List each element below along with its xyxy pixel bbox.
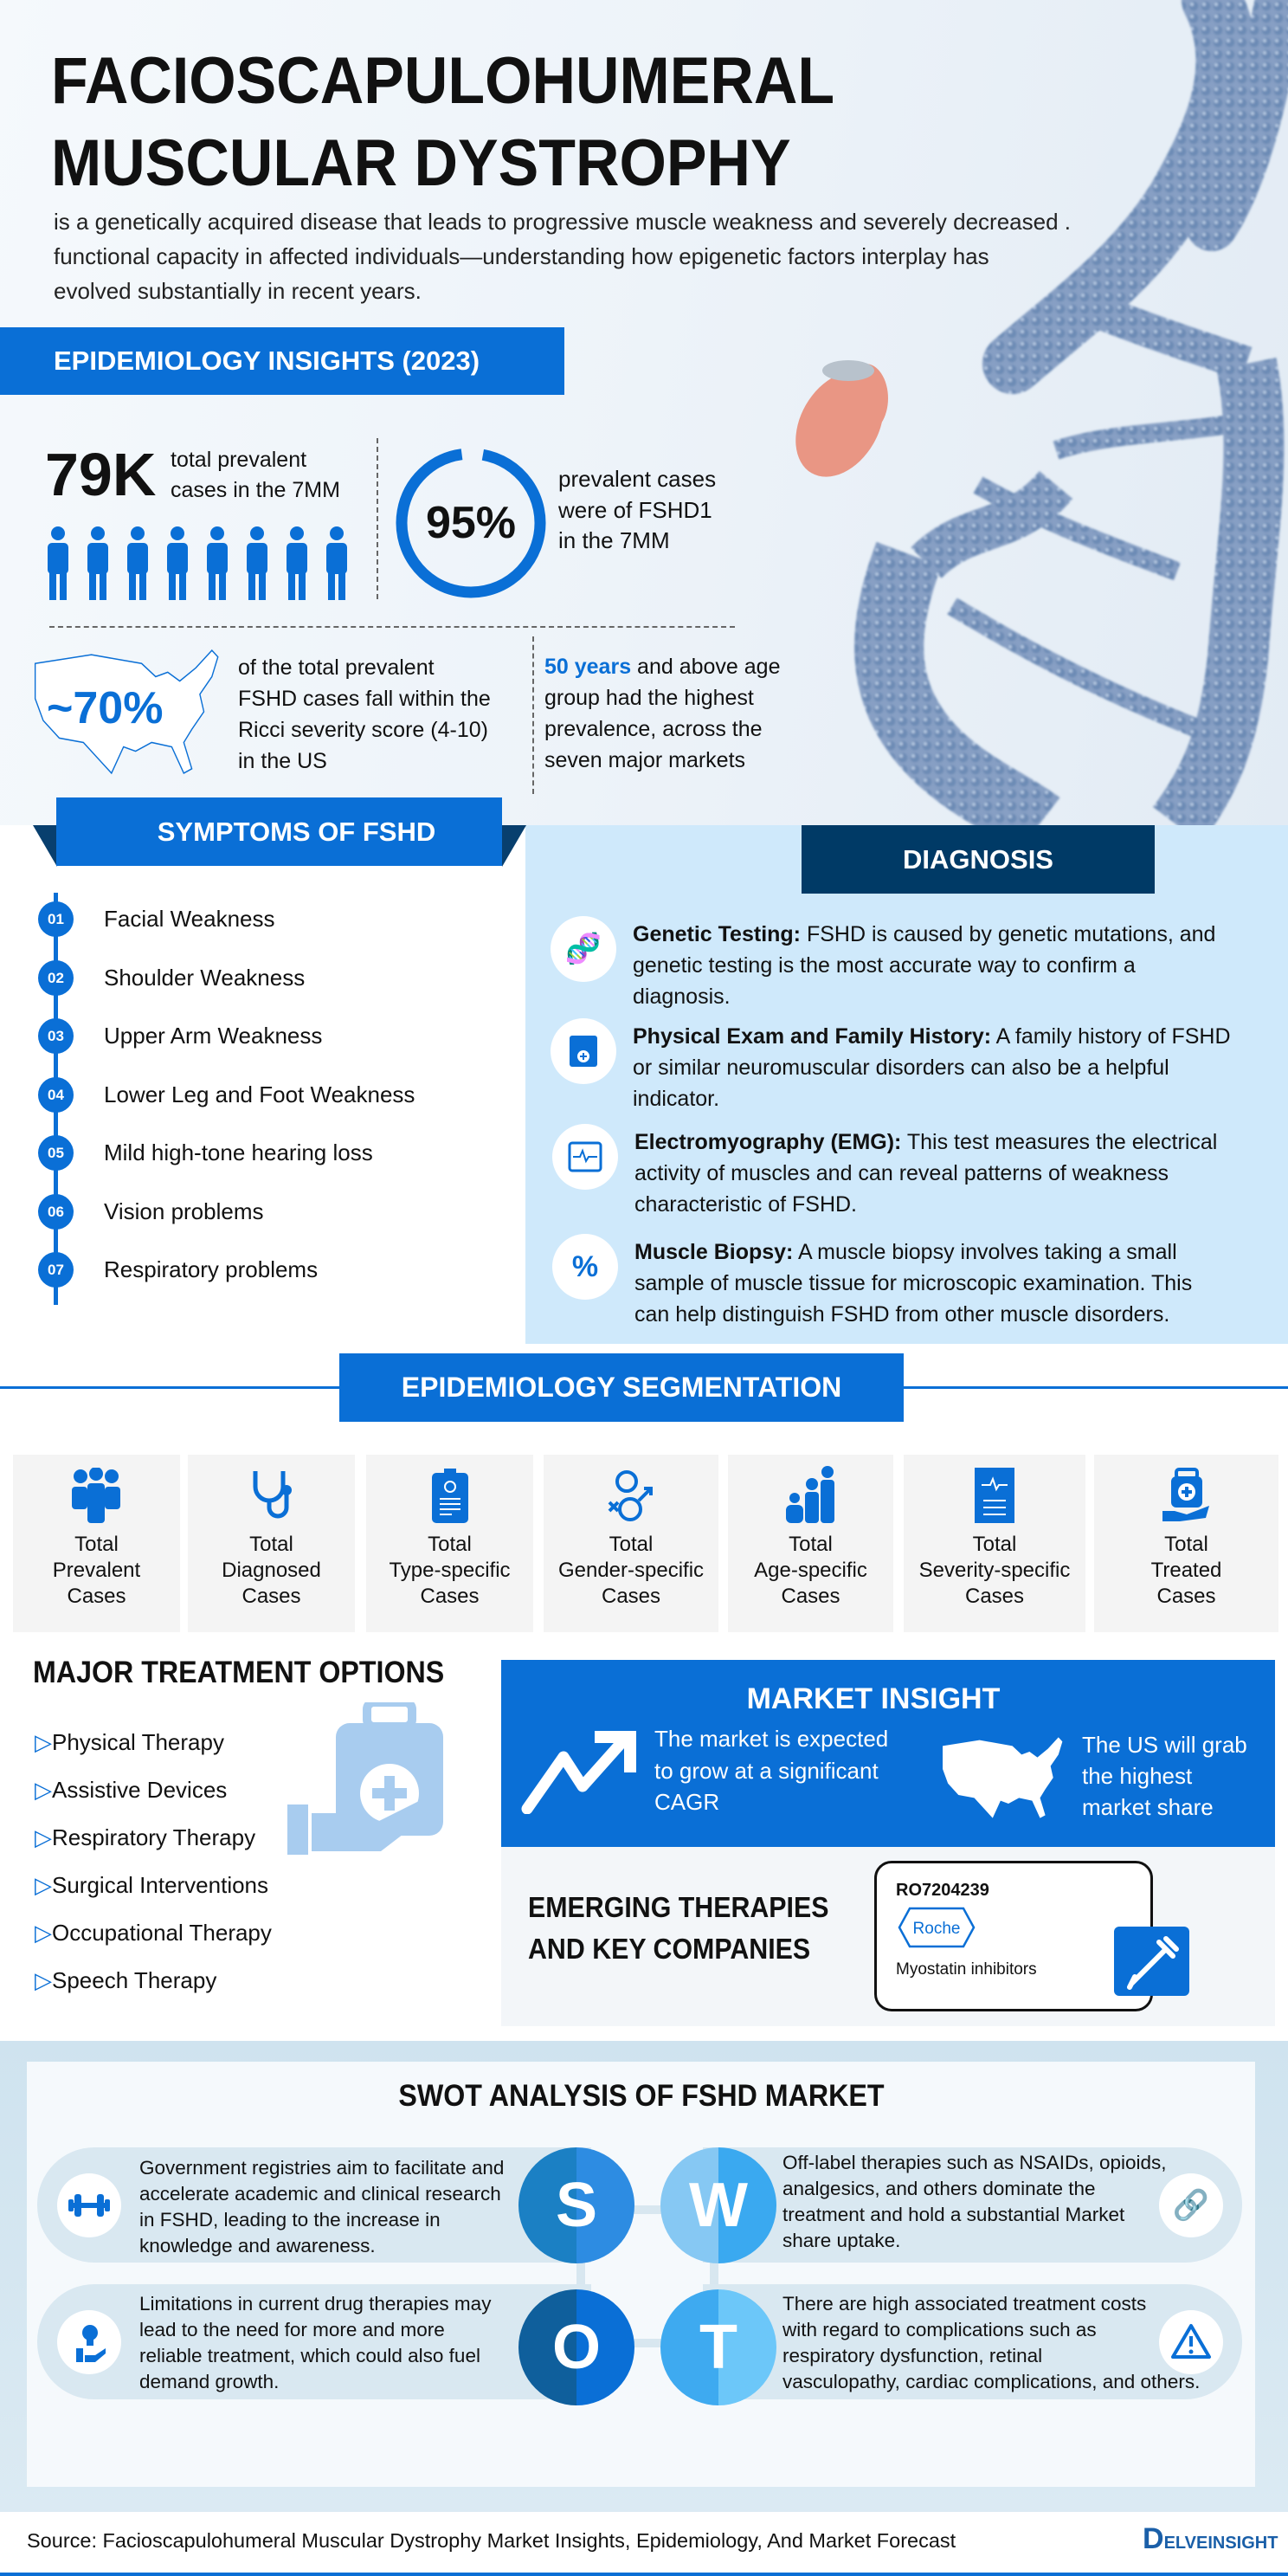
text: 50 years [544,655,781,772]
item: genetic testing: genetic testing is the most accurate way to confirm a [633,953,1136,978]
card: severity-specific [904,1455,1085,1632]
list: symptoms: Lower Leg and Foot Weakness [104,1081,415,1107]
background: top hero [0,0,1288,825]
card: treated: Total [1164,1533,1208,1556]
list: symptoms: Vision problems [104,1198,264,1224]
panel: emerging therapies [501,1847,1275,2026]
stat: ~70% US map [35,649,218,774]
stat: 95% ring: 95% [426,498,516,548]
panel: diagnosis background [525,825,1288,1344]
intro paragraph: functional capacity in affected individuals—understanding how epigenetic factors interplay has [54,243,989,269]
item: EMG: characteristic of FSHD. [634,1192,857,1217]
card: gender-specific: Gender-specific [558,1559,704,1582]
pill: opportunity: reliable treatment, which could also fuel [139,2345,480,2366]
pill: strength: knowledge and awareness. [139,2235,376,2256]
item: EMG: activity of muscles and can reveal patterns of weakness [634,1161,1169,1185]
pill: threat: There are high associated treatment costs [782,2293,1146,2315]
card: gender-specific: Total [609,1533,653,1556]
text: 95% description: were of FSHD1 [558,497,712,523]
text: 70% description: Ricci severity score (4-10) [238,718,488,742]
text: 50 years: prevalence, across the [544,717,763,741]
list: treatment options: ▷Speech Therapy [35,1967,216,1993]
list: symptoms: Shoulder Weakness [104,965,305,991]
pill: threat: vasculopathy, cardiac complications, and others. [782,2371,1200,2392]
card: diagnosed: Cases [242,1585,301,1608]
card: prevalent [13,1455,180,1632]
pill: opportunity: Limitations in current drug therapies may [139,2293,491,2315]
intro paragraph: is a genetically acquired disease that leads to progressive muscle weakness and severely decreased . [54,209,1071,235]
list: symptoms: 07 [48,1262,64,1278]
card: diagnosed: Total [249,1533,293,1556]
panel: emerging therapies: EMERGING THERAPIES [528,1891,829,1923]
pill: weakness: analgesics, and others dominate the [782,2178,1095,2199]
banner: epidemiology segmentation [339,1353,904,1422]
panel: emerging therapies: AND KEY COMPANIES [528,1933,810,1965]
circle: O [518,2289,634,2405]
card: RO7204239: Myostatin inhibitors [896,1960,1037,1979]
text: 95% description: prevalent cases [558,466,716,492]
divider line [0,1386,1288,1389]
item: EMG [552,1124,1217,1217]
card: severity-specific: Severity-specific [919,1559,1070,1582]
list: symptoms: Respiratory problems [104,1256,318,1282]
item: EMG: Electromyography (EMG): This test measures the electrical [634,1130,1217,1154]
panel: SWOT [27,2062,1255,2487]
item: physical exam: or similar neuromuscular disorders can also be a helpful [633,1056,1169,1080]
stat: 79K [45,441,340,508]
item: genetic testing: 🧬 [565,933,602,965]
list: treatment options: ▷Occupational Therapy [35,1920,272,1946]
list: treatment options: ▷Surgical Interventions [35,1872,268,1898]
card: type-specific: Total [428,1533,472,1556]
cards: segmentation [13,1455,1278,1632]
pill: opportunity: lead to the need for more and more [139,2319,445,2340]
pill: strength: Government registries aim to facilitate and [139,2157,504,2179]
icon: medical kit in hand [287,1702,443,1855]
footer bar [0,2573,1288,2576]
intro paragraph: evolved substantially in recent years. [54,278,422,304]
list: treatment options: ▷Respiratory Therapy [35,1824,255,1850]
list: symptoms: 01 [48,911,64,927]
logo: Roche [898,1907,975,1948]
pill: strength: accelerate academic and clinical research [139,2183,501,2205]
panel: market insight: The US will grab [1082,1732,1247,1758]
text: 70% description: of the total prevalent [238,655,435,680]
icon: people row [48,526,347,600]
list: symptoms: 04 [48,1086,64,1103]
card: type-specific: Type-specific [389,1559,511,1582]
banner: epidemiology insights [0,327,564,395]
pill: weakness: Off-label therapies such as NSAIDs, opioids, [782,2152,1167,2173]
banner: diagnosis [802,825,1155,894]
item: biopsy: % [572,1250,598,1283]
circle: T [660,2289,776,2405]
card: gender-specific [544,1455,718,1632]
title: MUSCULAR DYSTROPHY [51,126,791,200]
item: genetic testing [551,916,1215,1009]
divider dashed horizontal [49,626,735,628]
footer: source: Source: Facioscapulohumeral Muscular Dystrophy Market Insights, Epidemiology, And Market Forecast [27,2529,956,2552]
circle: S [518,2147,634,2263]
title: FACIOSCAPULOHUMERAL [51,44,834,118]
list: symptoms: Facial Weakness [104,906,275,932]
card: gender-specific: Cases [602,1585,660,1608]
banner: epidemiology segmentation: EPIDEMIOLOGY SEGMENTATION [402,1372,841,1403]
circle: O: O [552,2313,601,2382]
list: treatment options: ▷Physical Therapy [35,1729,224,1755]
panel: market insight: The market is expected [654,1726,888,1752]
icon: growth arrow [521,1731,636,1814]
pill: threat: with regard to complications such as [782,2319,1097,2340]
list: treatment options [35,1729,272,1993]
item: physical exam: indicator. [633,1087,719,1111]
list: diagnosis items [551,916,1231,1327]
title [51,44,834,200]
connector ring [576,2205,718,2347]
item: biopsy [552,1234,1192,1327]
item: physical exam: Physical Exam and Family History: A family history of FSHD [633,1024,1231,1049]
list: treatment options: ▷Assistive Devices [35,1777,227,1803]
divider dashed vertical 2 [532,636,534,794]
item: genetic testing: diagnosis. [633,985,731,1009]
stat: ~70% US map: ~70% [47,683,163,733]
panel: SWOT: SWOT ANALYSIS OF FSHD MARKET [398,2079,884,2113]
list: symptoms: Mild high-tone hearing loss [104,1140,373,1165]
card: severity-specific: Total [973,1533,1016,1556]
divider dashed vertical [377,438,378,599]
panel: market insight [501,1660,1275,1847]
pill: opportunity [37,2284,591,2399]
heading: major treatment options: MAJOR TREATMENT OPTIONS [33,1656,444,1689]
stat: 95% ring [396,449,545,597]
text: 70% description: in the US [238,749,327,773]
illustration: DNA helix [795,0,1288,825]
text: 70% description [238,655,491,773]
stat: 79K: total prevalent [171,448,306,472]
intro paragraph [54,209,1071,304]
card: treated: Cases [1156,1585,1216,1608]
card: prevalent: Prevalent [53,1559,140,1582]
card: diagnosed [188,1455,355,1632]
card: RO7204239 [874,1861,1153,2011]
banner: diagnosis: DIAGNOSIS [903,844,1053,875]
logo: DelveInsight: DELVEINSIGHT [1143,2522,1278,2555]
pill: weakness: treatment and hold a substantial Market [782,2204,1124,2225]
item: genetic testing: Genetic Testing: FSHD is caused by genetic mutations, and [633,922,1215,946]
card: severity-specific: Cases [965,1585,1024,1608]
circle: S: S [556,2171,597,2240]
circle: T: T [699,2313,737,2382]
pill: weakness [703,2147,1242,2263]
panel: market insight: to grow at a significant [654,1758,879,1784]
card: type-specific: Cases [420,1585,480,1608]
card: age-specific [728,1455,893,1632]
pill: strength [37,2147,591,2263]
card: prevalent: Cases [67,1585,126,1608]
icon: US map [943,1737,1063,1818]
text: 50 years: 50 years and above age [544,655,781,679]
text: 95% description [558,466,716,553]
section: SWOT background [0,2041,1288,2512]
list: symptoms: Upper Arm Weakness [104,1023,322,1049]
text: 95% description: in the 7MM [558,527,670,553]
panel: market insight: CAGR [654,1789,719,1815]
list: symptoms [38,893,415,1305]
pill: threat: respiratory dysfunction, retinal [782,2345,1042,2366]
pill: strength: in FSHD, leading to the increase in [139,2209,441,2231]
text: 50 years: group had the highest [544,686,754,710]
icon: syringe [1114,1927,1189,1996]
card: treated [1094,1455,1278,1632]
item: physical exam [551,1018,1231,1111]
pill: weakness: share uptake. [782,2230,900,2251]
pill: opportunity: demand growth. [139,2371,279,2392]
panel: market insight: market share [1082,1794,1214,1820]
card: RO7204239: RO7204239 [896,1881,989,1900]
banner: epidemiology insights: EPIDEMIOLOGY INSIGHTS (2023) [54,345,480,376]
stat: 79K: 79K [45,441,156,508]
item: biopsy: sample of muscle tissue for microscopic examination. This [634,1271,1192,1295]
circle: W: W [689,2171,748,2240]
item: biopsy: can help distinguish FSHD from other muscle disorders. [634,1302,1169,1327]
pill: threat [703,2284,1242,2399]
card: prevalent: Total [74,1533,119,1556]
stat: 79K: cases in the 7MM [171,478,340,502]
card: age-specific: Total [789,1533,833,1556]
card: type-specific [366,1455,533,1632]
pill: weakness: 🔗 [1173,2189,1209,2222]
list: symptoms: 02 [48,970,64,985]
card: diagnosed: Diagnosed [222,1559,321,1582]
list: symptoms: 05 [48,1145,64,1161]
list: symptoms: 06 [48,1204,64,1219]
card: age-specific: Cases [781,1585,840,1608]
panel: market insight: MARKET INSIGHT [747,1682,1000,1715]
circle: W [660,2147,776,2263]
list: symptoms: 03 [48,1028,64,1044]
item: biopsy: Muscle Biopsy: A muscle biopsy involves taking a small [634,1240,1177,1264]
banner: symptoms [33,797,526,867]
panel: market insight: the highest [1082,1763,1192,1789]
logo: Roche: Roche [913,1920,960,1938]
text: 50 years: seven major markets [544,748,745,772]
card: age-specific: Age-specific [754,1559,867,1582]
banner: symptoms: SYMPTOMS OF FSHD [158,817,435,847]
card: treated: Treated [1151,1559,1221,1582]
text: 70% description: FSHD cases fall within the [238,687,491,711]
